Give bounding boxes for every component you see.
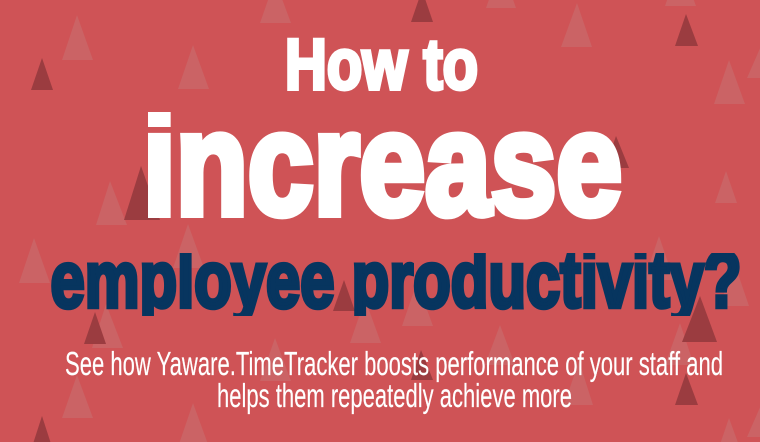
heading: How to: How to — [285, 26, 478, 105]
subtitle: helps them repeatedly achieve more — [217, 377, 572, 414]
subtitle — [65, 345, 723, 414]
heading: increase: increase — [143, 82, 622, 245]
